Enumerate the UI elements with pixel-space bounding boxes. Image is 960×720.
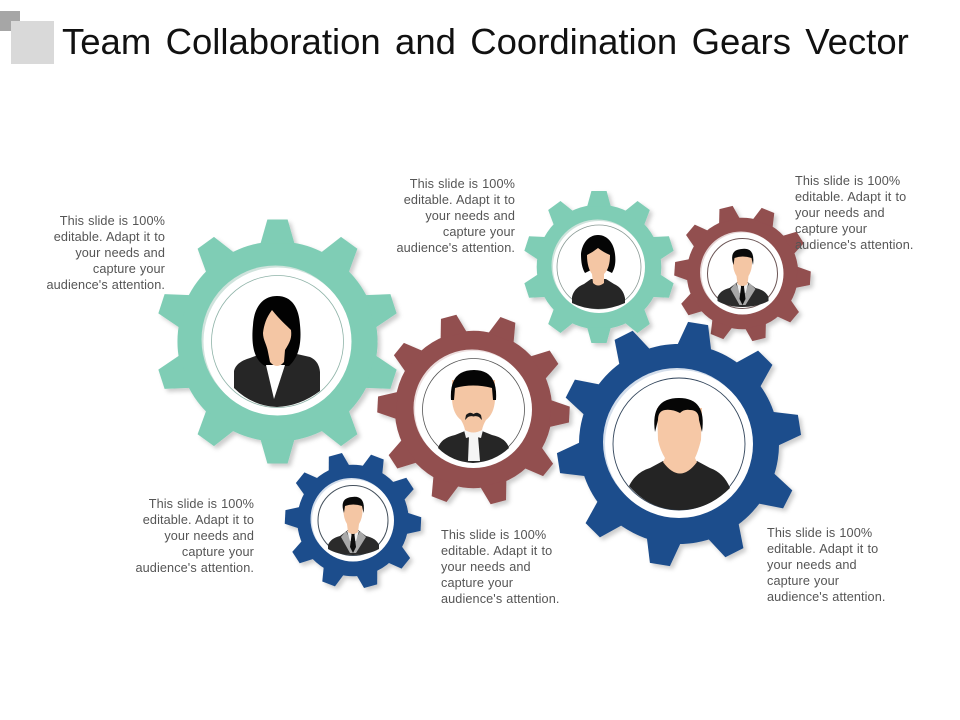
small maroon gear body (660, 191, 825, 356)
person: man in grey suit (328, 497, 379, 555)
gear: large blue (540, 305, 818, 583)
decoration: dark corner square (0, 11, 20, 31)
person: man with moustache (438, 370, 509, 463)
person: woman in suit (234, 296, 320, 407)
blue gear hub (603, 368, 753, 518)
decoration: light corner square (11, 21, 54, 64)
small green gear hub (552, 220, 645, 313)
person: woman with dark top (572, 235, 625, 309)
small maroon gear hub (700, 232, 784, 314)
gear: large green (156, 220, 399, 464)
title: Team Collaboration and Coordination Gears Vector (62, 21, 909, 62)
small blue gear body (270, 437, 436, 604)
gear: small maroon (660, 191, 825, 356)
green gear hub (202, 266, 352, 416)
green gear body (156, 220, 399, 464)
text block: small green gear: This slide is 100% editable. Adapt it to your needs and capture your audience's attention. (396, 177, 515, 255)
text block: small maroon gear: This slide is 100% editable. Adapt it to your needs and capture your audience's attention. (795, 174, 914, 252)
gear: medium maroon (356, 292, 591, 527)
small green gear body (523, 191, 675, 343)
text block: large green gear: This slide is 100% editable. Adapt it to your needs and capture your audience's attention. (46, 214, 165, 292)
blue gear body (540, 305, 818, 583)
person: man in dark shirt (629, 398, 730, 510)
small blue gear hub (310, 478, 394, 562)
text block: small blue gear: This slide is 100% editable. Adapt it to your needs and capture your audience's attention. (136, 497, 254, 575)
gear: small green (523, 191, 675, 343)
maroon gear body (356, 292, 591, 527)
text block: large blue gear: This slide is 100% editable. Adapt it to your needs and capture your audience's attention. (767, 526, 886, 604)
gear: small blue (270, 437, 436, 604)
person: man in grey suit (718, 249, 768, 307)
text block: medium maroon gear: This slide is 100% editable. Adapt it to your needs and capture your audience's attention. (441, 528, 560, 606)
maroon gear hub (414, 350, 532, 468)
